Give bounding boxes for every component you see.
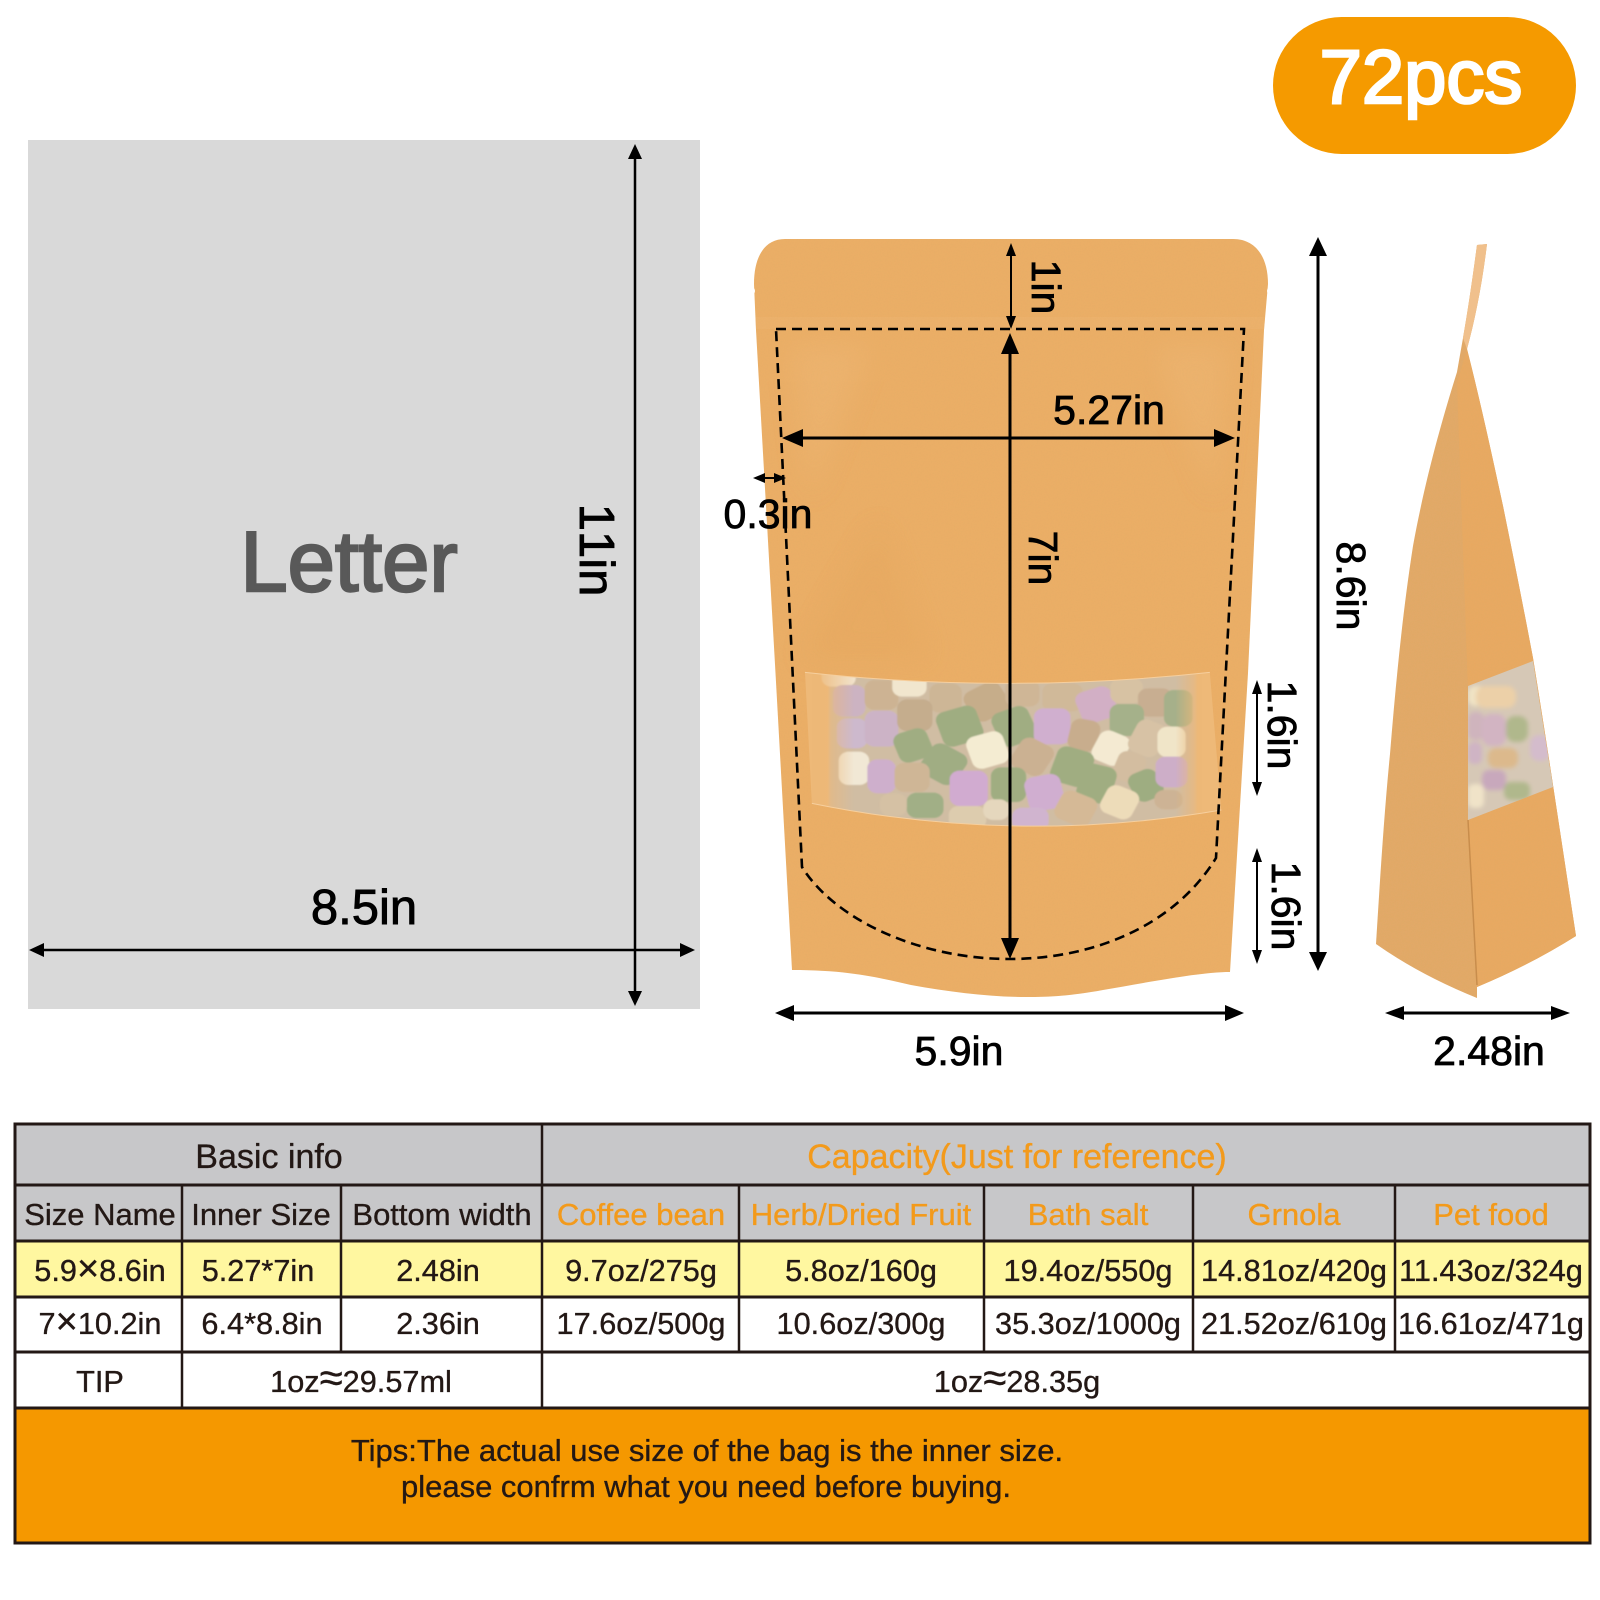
column headers: Size Name xyxy=(24,1197,176,1232)
row: 5.9x8.6in xyxy=(34,1248,1583,1290)
right panel xyxy=(1457,349,1576,987)
row: 5.9x8.6in: 19.4oz/550g xyxy=(1004,1253,1172,1288)
tips text xyxy=(351,1433,1063,1504)
column headers: Pet food xyxy=(1433,1197,1549,1232)
row: 7x10.2in: 35.3oz/1000g xyxy=(995,1306,1181,1341)
side window xyxy=(1468,661,1553,820)
row: 5.9x8.6in: 2.48in xyxy=(396,1253,480,1288)
row: 7x10.2in: 10.6oz/300g xyxy=(777,1306,945,1341)
row: 7x10.2in: 21.52oz/610g xyxy=(1201,1306,1387,1341)
row 5.9x8.6 fill xyxy=(15,1241,1590,1297)
row: 5.9x8.6in: 5.9×8.6in xyxy=(34,1248,166,1290)
grid lines xyxy=(15,1124,1590,1543)
badge: 72pcs xyxy=(1273,17,1576,154)
row: 7x10.2in: 16.61oz/471g xyxy=(1398,1306,1584,1341)
row: 5.9x8.6in: 9.7oz/275g xyxy=(565,1253,717,1288)
column headers: Bottom width xyxy=(352,1197,532,1232)
row: 5.9x8.6in: 11.43oz/324g xyxy=(1399,1253,1583,1288)
row: 7x10.2in: 7×10.2in xyxy=(39,1301,161,1343)
heading: Letter: Letter xyxy=(240,515,458,610)
arrow: 1.6in bottom xyxy=(1252,848,1262,964)
hang notches xyxy=(747,287,1275,295)
section headers xyxy=(195,1138,1227,1176)
arrow: 1in xyxy=(1006,243,1016,329)
label: 11in: 11in xyxy=(569,504,623,596)
row: tip conversions xyxy=(76,1354,1100,1401)
column headers: Bath salt xyxy=(1028,1197,1149,1232)
arrow: 5.9in xyxy=(775,1005,1244,1021)
column headers: Inner Size xyxy=(191,1197,331,1232)
panel: letter paper comparison xyxy=(28,140,700,1009)
panel: front view of kraft bag xyxy=(724,237,1374,1074)
row: 5.9x8.6in: 5.27*7in xyxy=(202,1253,314,1288)
label: 8.6in: 8.6in xyxy=(1328,542,1374,630)
row: tip conversions: 1oz≈29.57ml xyxy=(270,1354,452,1401)
arrow: 2.48in xyxy=(1385,1006,1570,1020)
section headers: Basic info xyxy=(195,1138,343,1176)
row: tip conversions: TIP xyxy=(76,1364,124,1399)
header fills xyxy=(15,1124,1590,1241)
label: 5.27in: 5.27in xyxy=(1053,387,1165,433)
label: 1in: 1in xyxy=(1023,260,1069,314)
table: size and capacity xyxy=(15,1124,1590,1543)
fold crease xyxy=(1468,820,1477,985)
row: 5.9x8.6in: 5.8oz/160g xyxy=(785,1253,937,1288)
label: 8.5in: 8.5in xyxy=(311,881,417,935)
label: 2.48in: 2.48in xyxy=(1433,1028,1545,1074)
arrow: letter height xyxy=(628,144,642,1006)
arrow: 5.27in xyxy=(782,429,1235,447)
arrow: letter width xyxy=(29,943,695,957)
label: 1.6in bottom: 1.6in xyxy=(1263,862,1309,950)
badge: 72pcs: 72pcs xyxy=(1320,35,1522,120)
label: 7in: 7in xyxy=(1020,531,1066,585)
top seal xyxy=(1463,244,1487,349)
row: 7x10.2in xyxy=(39,1301,1584,1343)
arrow: 1.6in window xyxy=(1252,680,1262,796)
column headers: Coffee bean xyxy=(557,1197,725,1232)
window with pellets xyxy=(805,672,1222,827)
column headers: Herb/Dried Fruit xyxy=(751,1197,972,1232)
column headers xyxy=(24,1197,1549,1232)
frosted edge fades xyxy=(820,674,850,809)
arrow: 8.6in xyxy=(1309,237,1327,971)
row: tip conversions: 1oz≈28.35g xyxy=(934,1354,1100,1401)
label: 1.6in window: 1.6in xyxy=(1259,681,1305,769)
row: 7x10.2in: 6.4*8.8in xyxy=(201,1306,323,1341)
row: 7x10.2in: 2.36in xyxy=(396,1306,480,1341)
row: 7x10.2in: 17.6oz/500g xyxy=(557,1306,725,1341)
tips band fill xyxy=(15,1408,1590,1543)
label: 5.9in: 5.9in xyxy=(915,1028,1003,1074)
tips text: Tips:The actual use size of the bag is the inner size. xyxy=(351,1433,1063,1468)
bag silhouette xyxy=(754,239,1268,997)
tips text: please confrm what you need before buying. xyxy=(401,1469,1011,1504)
inner dimension dashed outline xyxy=(776,329,1244,959)
seal band and soft folds xyxy=(750,317,1270,660)
column headers: Grnola xyxy=(1247,1197,1341,1232)
row: 5.9x8.6in: 14.81oz/420g xyxy=(1201,1253,1387,1288)
arrow: 7in xyxy=(1001,333,1019,959)
label: 0.3in: 0.3in xyxy=(724,491,812,537)
window edge highlights xyxy=(805,672,1210,683)
panel: side view of kraft bag xyxy=(1376,244,1576,998)
side silhouette xyxy=(1376,244,1576,998)
arrow: 0.3in xyxy=(753,473,786,483)
section headers: Capacity(Just for reference) xyxy=(807,1138,1227,1176)
